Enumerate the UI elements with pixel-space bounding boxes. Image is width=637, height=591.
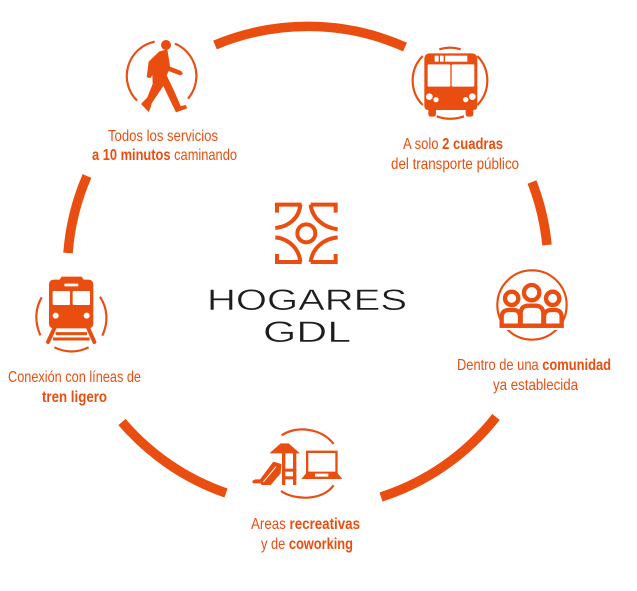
caption: community: Dentro de una comunidad xyxy=(457,357,611,374)
caption: bus xyxy=(391,136,519,173)
caption: train: Conexión con líneas de xyxy=(8,369,141,386)
icon: bus xyxy=(413,48,487,119)
icon: walking person xyxy=(127,40,196,112)
icon: playground and laptop xyxy=(252,429,342,498)
caption: train: tren ligero xyxy=(42,389,107,406)
caption: bus: del transporte público xyxy=(391,156,519,173)
logo mark xyxy=(275,205,338,262)
caption: train xyxy=(8,369,141,406)
logo wordmark: GDL xyxy=(263,316,351,349)
logo wordmark: HOGARES xyxy=(207,284,407,317)
caption: walking: a 10 minutos caminando xyxy=(92,147,237,164)
icon: community xyxy=(495,270,569,340)
caption: community: ya establecida xyxy=(493,377,578,394)
caption: community xyxy=(457,357,611,394)
caption: walking xyxy=(92,128,237,164)
caption: recreation: Areas recreativas xyxy=(251,516,360,533)
caption: recreation: y de coworking xyxy=(261,536,353,553)
caption: walking: Todos los servicios xyxy=(108,128,218,145)
caption: bus: A solo 2 cuadras xyxy=(403,136,503,153)
ring arcs xyxy=(68,26,547,497)
logo wordmark xyxy=(207,284,407,349)
icon: light rail train xyxy=(36,277,106,351)
caption: recreation xyxy=(251,516,360,553)
